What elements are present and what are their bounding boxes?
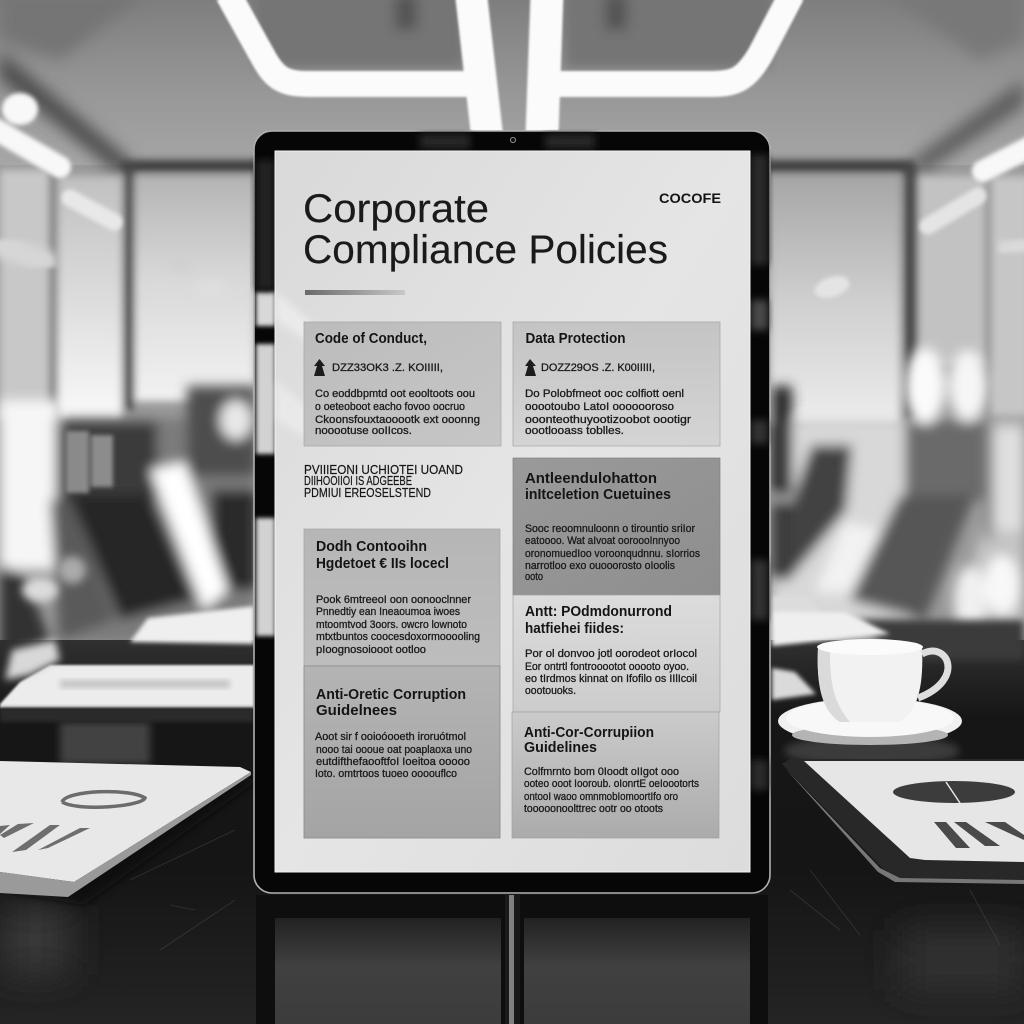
panel: anti-fraud guidelines, dark: narrotloo exo ouooorosto oIoolis	[525, 560, 675, 572]
panel: anti-corruption guidelines, right: Guidelines	[524, 740, 597, 756]
panel: data protection: Data Protection	[526, 331, 626, 347]
panel: anti-fraud guidelines, dark: eatoooo. Wat aIvoat ooroooInnyoo	[525, 535, 680, 547]
bezel reflections	[256, 134, 768, 790]
panel: third policy card: Dodh Contooihn	[316, 539, 427, 555]
panel: anti-corruption guidelines, left: nooo tai oooue oat poaplaoxa uno	[316, 744, 472, 756]
icon: figure	[525, 359, 536, 376]
panel: third policy card: mtxtbuntos coocesdoxormooooling	[316, 631, 480, 643]
panel: data protection: ooootoubo LatoI ooooooroso	[525, 401, 674, 413]
tablet device	[254, 131, 770, 893]
panel: code of conduct: Co eoddbpmtd oot eooltoots oou	[315, 388, 475, 400]
chart arc on paper	[62, 792, 145, 807]
panel: anti-bribery rules: Eor ontrtl fontrooootot ooooto oyoo.	[525, 661, 689, 673]
panel: anti-corruption guidelines, right: ontooI waoo omnmobIomoortIfo oro	[524, 791, 678, 803]
text block: uppercase note	[304, 463, 463, 500]
panel: anti-corruption guidelines, right	[512, 712, 719, 838]
title	[303, 187, 668, 272]
background chairs	[0, 348, 1024, 660]
panel: anti-corruption guidelines, left	[304, 666, 500, 838]
boardroom table	[0, 596, 1024, 1024]
panel: third policy card: Pook 6mtreeoI oon oonooclnner	[316, 594, 471, 606]
chair back detail, left	[22, 431, 113, 602]
panel: anti-bribery rules: Por ol donvoo jotl oorodeot orIocol	[525, 648, 697, 660]
title: Corporate	[303, 187, 489, 231]
tablet screen	[275, 151, 750, 872]
panel: anti-corruption guidelines, right: tooooonoolttrec ootr oo otoots	[524, 803, 663, 815]
text block: uppercase note: DIIHOOIIOI IS ADGEEBE	[304, 474, 412, 488]
panel: code of conduct	[304, 322, 501, 446]
panel: anti-bribery rules: eo tIrdmos kinnat on Ifofilo os IIlIcoil	[525, 673, 697, 685]
ceiling lights	[228, 0, 792, 135]
panel: data protection: ooonteothuyootizoobot oootigr	[525, 414, 691, 426]
panel: anti-corruption guidelines, left: Guidelnees	[316, 703, 397, 719]
panel: anti-fraud guidelines, dark: Antleendulohatton	[525, 471, 657, 487]
folder with chart paper, right	[782, 759, 1024, 884]
panel: anti-fraud guidelines, dark: oronomuedIoo voroonqudnnu. sIorrios	[525, 548, 700, 560]
bar chart on paper	[934, 822, 1024, 848]
wall lights, left	[0, 93, 226, 302]
panel: data protection: Do Polobfmeot ooc colfiott oenl	[525, 388, 684, 400]
tablet reflection on table	[256, 895, 768, 1024]
panel: code of conduct: o oeteoboot eacho fovoo oocruo	[315, 401, 465, 413]
panel: anti-corruption guidelines, right: Colfmrnto bom 0Ioodt oIIgot ooo	[524, 766, 679, 778]
panel: data protection	[513, 322, 720, 446]
panel: anti-bribery rules: hatfiehei fiides:	[525, 621, 624, 637]
pie chart on paper	[893, 781, 1015, 803]
icon: camera	[510, 137, 516, 143]
panel: anti-fraud guidelines, dark: inItceletion Cuetuines	[525, 487, 671, 503]
panel: anti-bribery rules	[513, 595, 720, 712]
text block: uppercase note: PVIIIEONI UCHIOTEI UOAND	[304, 463, 463, 477]
panel: anti-corruption guidelines, left: Aoot sir f ooioóooeth iroruótmol	[315, 731, 466, 743]
panel: third policy card: Hgdetoet € IIs locecl	[316, 556, 449, 572]
panel: third policy card: mtoomtvod 3oors. owcro lownoto	[316, 619, 467, 631]
panel: anti-fraud guidelines, dark: ooto	[525, 571, 543, 583]
panel: anti-fraud guidelines, dark: Sooc reoomnuloonn o tirountio sriIor	[525, 523, 695, 535]
title: Compliance Policies	[303, 228, 668, 272]
panel: data protection: oootlooass toblles.	[525, 425, 624, 437]
panel: code of conduct: Code of Conduct,	[315, 331, 427, 347]
title underline	[305, 290, 405, 295]
wall lights, right	[812, 147, 1024, 302]
panel: data protection: DOZZ29OS .Z. K00IIIII,	[541, 362, 655, 374]
panel: code of conduct: Ckoonsfouxtaooootk ext ooonng	[315, 414, 480, 426]
icon: figure	[314, 359, 325, 376]
panel: anti-corruption guidelines, left: eutdifthefaooftfoI Ioeitoa ooooo	[316, 756, 470, 768]
brand label: COCOFE	[659, 191, 721, 206]
panel: third policy card: pIoognosoiooot ootloo	[316, 644, 426, 656]
panel: anti-corruption guidelines, left: Ioto. omtrtoos tuoeo oooouflco	[315, 768, 457, 780]
panel: anti-fraud guidelines, dark	[513, 458, 720, 595]
panel: anti-corruption guidelines, left: Anti-Oretic Corruption	[316, 687, 466, 703]
panel: anti-corruption guidelines, right: Anti-Cor-Corrupiion	[524, 725, 654, 741]
panel: anti-bribery rules: oootouoks.	[525, 685, 576, 697]
coffee cup and saucer	[778, 639, 962, 767]
bar chart on paper	[0, 823, 90, 852]
papers on the table, left	[0, 761, 261, 905]
panel: anti-corruption guidelines, right: ooteo ooot Iooroub. oIonrtE oeIoootorts	[524, 778, 699, 790]
panel: anti-bribery rules: Antt: POdmdonurrond	[525, 604, 672, 620]
text block: uppercase note: PDMIUI EREOSELSTEND	[304, 486, 431, 500]
panel: third policy card: Pnnedtiy ean Ineaoumoa iwoes	[316, 606, 460, 618]
panel: third policy card	[304, 529, 500, 666]
panel: code of conduct: nooootuse ooIIcos.	[315, 425, 412, 437]
panel: code of conduct: DZZ33OK3 .Z. KOIIIII,	[332, 362, 443, 374]
